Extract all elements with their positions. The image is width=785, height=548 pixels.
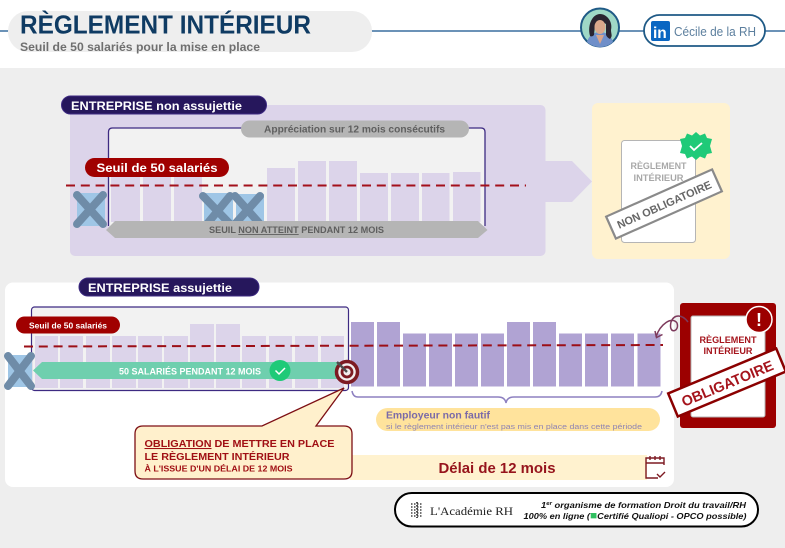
bar chart: first 12 months xyxy=(35,324,344,388)
threshold dashed line xyxy=(66,184,526,186)
cross xyxy=(8,355,32,387)
heading: seuil xyxy=(16,316,120,334)
heading: seuil: Seuil de 50 salariés xyxy=(29,320,107,330)
heading: entreprise assujettie xyxy=(79,278,259,296)
title: RÈGLEMENT INTÉRIEUR xyxy=(20,10,311,40)
callout: employeur non fautif xyxy=(376,408,660,431)
label: 12 mois consécutifs: Appréciation sur 12 mois consécutifs xyxy=(264,124,445,136)
bar chart: following 12 months xyxy=(351,322,660,386)
bar chart: workforce over 12 months xyxy=(77,161,480,226)
bracket xyxy=(352,391,662,403)
panel: entreprise assujettie xyxy=(5,282,674,487)
callout: obligation: À L'ISSUE D'UN DÉLAI DE 12 MOIS xyxy=(144,464,293,474)
document xyxy=(622,140,696,242)
footer: L'Académie RH: organisme de formation Droit du travail/RH xyxy=(552,500,747,510)
delay band: Délai de 12 mois xyxy=(438,460,556,477)
title block xyxy=(8,10,372,54)
footer: L'Académie RH: 1 xyxy=(541,500,546,510)
heading: entreprise non assujettie xyxy=(62,96,266,114)
LinkedIn badge: Cécile de la RH xyxy=(674,25,756,39)
heading: seuil xyxy=(85,158,229,177)
heading: entreprise non assujettie: ENTREPRISE non assujettie xyxy=(71,99,242,113)
footer: L'Académie RH: 100% en ligne ( ■Certifié Qualiopi - OPCO possible) xyxy=(524,510,747,522)
panel: non obligatoire xyxy=(592,103,730,259)
stamp: non obligatoire: NON OBLIGATOIRE xyxy=(616,179,714,232)
footer: L'Académie RH: L'Académie RH xyxy=(430,504,513,518)
assessment box xyxy=(32,307,348,390)
crosses xyxy=(77,195,260,224)
stamp: non obligatoire xyxy=(606,169,722,239)
panel: obligatoire xyxy=(668,303,785,428)
label: seuil non atteint xyxy=(106,221,488,238)
callout: employeur non fautif: Employeur non fautif xyxy=(386,410,491,422)
document: INTÉRIEUR xyxy=(704,346,753,356)
callout: obligation: LE RÈGLEMENT INTÉRIEUR xyxy=(144,450,290,463)
icon: exclamation: ! xyxy=(756,310,762,330)
assessment box xyxy=(108,128,485,226)
avatar xyxy=(581,8,619,47)
heading: entreprise assujettie: ENTREPRISE assujettie xyxy=(88,281,232,295)
callout: obligation xyxy=(135,388,352,479)
footer: L'Académie RH: er xyxy=(546,501,553,507)
document: RÈGLEMENT xyxy=(630,161,687,171)
stamp: obligatoire: OBLIGATOIRE xyxy=(679,358,776,411)
label: 12 mois consécutifs xyxy=(241,120,469,138)
threshold dashed line xyxy=(24,345,663,346)
arrow to result xyxy=(545,161,592,202)
arrow: curl xyxy=(655,316,688,338)
document xyxy=(691,316,765,417)
arrow: 50 salariés pendant 12 mois: 50 SALARIÉS PENDANT 12 MOIS xyxy=(119,366,261,378)
arrow: 50 salariés pendant 12 mois xyxy=(33,362,340,379)
subtitle: Seuil de 50 salariés pour la mise en place xyxy=(20,42,260,54)
icon: dotted logo xyxy=(411,502,423,518)
icon: target xyxy=(336,362,358,382)
icon: calendar xyxy=(646,456,665,478)
document: RÈGLEMENT xyxy=(700,335,757,345)
icon: green check badge xyxy=(680,132,712,160)
label: seuil non atteint: SEUIL NON ATTEINT PENDANT 12 MOIS xyxy=(209,225,384,235)
icon: green check badge xyxy=(270,360,290,381)
footer: L'Académie RH xyxy=(395,493,758,526)
heading: seuil: Seuil de 50 salariés xyxy=(96,161,218,175)
icon: LinkedIn: in xyxy=(653,25,667,42)
panel: entreprise non assujettie xyxy=(66,105,592,256)
document: INTÉRIEUR xyxy=(634,173,684,183)
callout: obligation: OBLIGATION DE METTRE EN PLACE xyxy=(144,438,334,450)
delay band xyxy=(350,455,647,480)
callout: employeur non fautif: si le règlement intérieur n'est pas mis en place dans cette période xyxy=(386,422,642,431)
LinkedIn badge xyxy=(644,15,765,46)
